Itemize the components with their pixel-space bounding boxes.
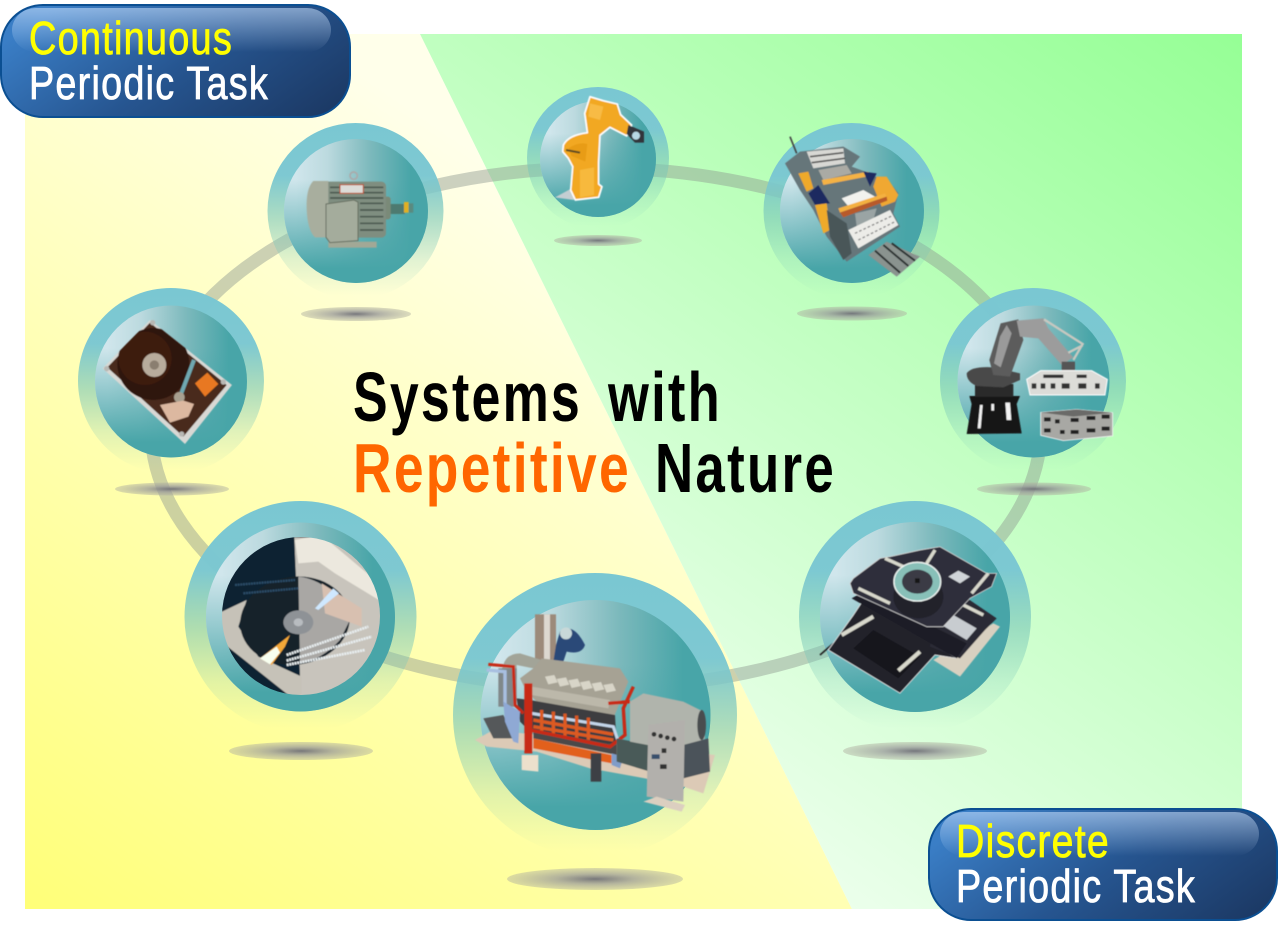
- badge text: Discrete: Discrete: [956, 815, 1110, 867]
- node: CD-ROM drive: [184, 501, 416, 733]
- badge: Continuous Periodic Task: [1, 5, 350, 117]
- icon: palletizer: [967, 318, 1113, 441]
- ring connecting the systems: [151, 168, 1041, 688]
- node: XY positioning stage: [799, 501, 1031, 733]
- background: discrete region (green): [420, 34, 1242, 909]
- icon: electric motor: [307, 172, 413, 248]
- icon: engine generator set: [475, 614, 715, 812]
- ground shadows: [115, 235, 1091, 890]
- node: printing machine: [764, 123, 940, 299]
- title: Systems with Repetitive Nature: Nature: [655, 429, 836, 507]
- icon: printing press: [785, 137, 920, 277]
- badge text: Periodic Task: Periodic Task: [956, 860, 1196, 912]
- node: hard disk drive: [78, 288, 264, 474]
- title: Systems with Repetitive Nature: [353, 358, 836, 507]
- badge text: Continuous: Continuous: [29, 12, 233, 64]
- icon: yellow robot: [555, 97, 644, 200]
- node: generator engine: [453, 573, 737, 857]
- node: electric motor: [268, 123, 444, 299]
- icon: optical disc drive: [222, 537, 380, 695]
- node: industrial robot arm: [527, 87, 669, 229]
- title: Systems with Repetitive Nature: Repetitive: [353, 429, 631, 507]
- background: continuous region (yellow): [25, 34, 852, 909]
- title: Systems with Repetitive Nature: with: [607, 358, 722, 436]
- icon: XY stage: [820, 547, 1000, 693]
- icon: hard disk: [103, 320, 232, 444]
- badge text: Periodic Task: Periodic Task: [29, 57, 269, 109]
- badge: Discrete Periodic Task: [929, 809, 1277, 920]
- title: Systems with Repetitive Nature: Systems: [353, 358, 582, 436]
- node: palletizing robot: [940, 288, 1126, 474]
